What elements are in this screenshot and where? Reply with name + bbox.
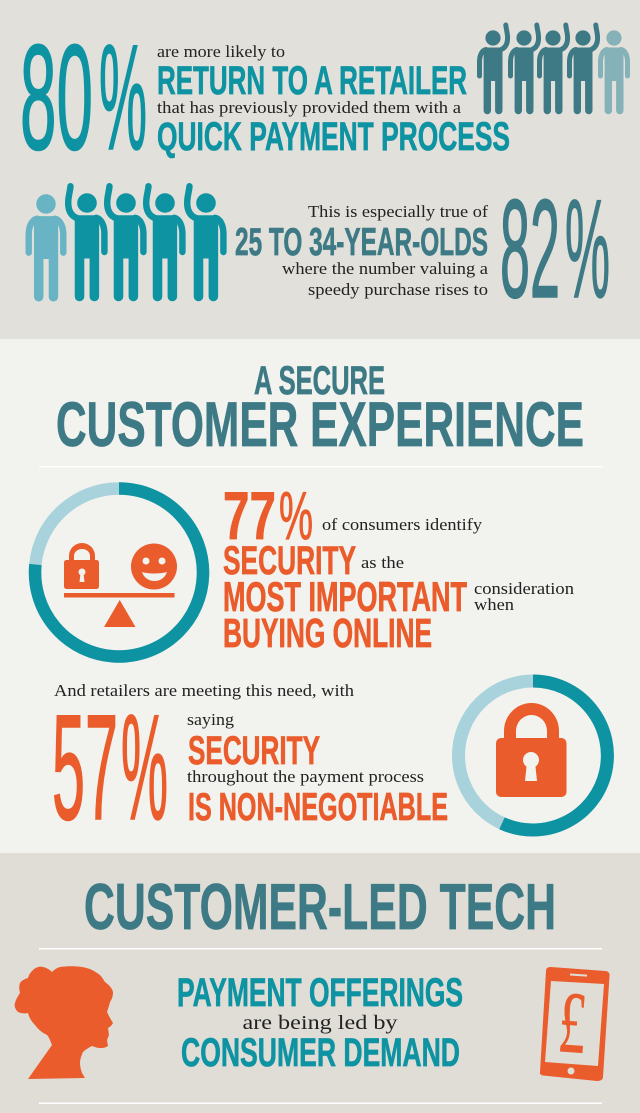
heading: a secure: A SECURE <box>254 359 385 403</box>
text: as the: as the <box>361 553 404 572</box>
text: speedy purchase: speedy purchase rises to <box>308 280 488 299</box>
statistic: 77 percent: % <box>279 478 313 554</box>
heading: most important: MOST IMPORTANT <box>223 573 467 620</box>
text: are more likely to: are more likely to <box>157 42 285 61</box>
text: especially true: This is especially true of <box>308 202 489 221</box>
icon: woman silhouette <box>15 966 113 1079</box>
text: throughout the payment process: throughout the payment process <box>187 767 424 786</box>
statistic: 57 percent <box>52 683 168 851</box>
heading: consumer demand: CONSUMER DEMAND <box>181 1031 460 1075</box>
heading: security: SECURITY <box>223 539 356 583</box>
text: % <box>121 683 168 851</box>
text: % <box>99 13 147 181</box>
text: are being led by: are being led by <box>242 1012 398 1034</box>
icon: five people, four of them raising a hand <box>480 25 628 114</box>
text: number valuing: where the number valuing a <box>282 259 489 278</box>
icon: padlock <box>496 703 566 797</box>
panel: top background <box>0 0 640 339</box>
text: consideration when: consideration <box>474 579 574 598</box>
text: saying: saying <box>187 710 234 729</box>
text: consideration when <box>474 579 574 614</box>
heading: 25 to 34-year-olds: 25 TO 34-YEAR-OLDS <box>235 221 488 264</box>
heading: buying online: BUYING ONLINE <box>223 610 432 656</box>
chart: 57 percent ring <box>458 681 608 830</box>
icon: mobile phone with pound sign <box>540 967 610 1081</box>
chart: 77 percent ring <box>35 488 203 656</box>
text: previously provided: that has previously provided them with a <box>157 98 462 117</box>
heading: return to a retailer: RETURN TO A RETAILER <box>157 59 467 103</box>
heading: payment offerings: PAYMENT OFFERINGS <box>177 971 463 1015</box>
statistic: 77 percent: 77 <box>223 478 276 554</box>
heading: is non-negotiable: IS NON-NEGOTIABLE <box>188 786 448 829</box>
heading: security: SECURITY <box>188 729 320 773</box>
panel: middle background <box>0 339 640 853</box>
text: consideration when: when <box>474 595 514 614</box>
text: of consumers identify: of consumers identify <box>322 515 483 534</box>
icon: mobile phone with pound sign: £ <box>556 974 589 1073</box>
panel: bottom background <box>0 853 640 1113</box>
icon: five younger people, four of them raising a hand <box>29 186 223 302</box>
icon: scale balancing padlock and smiley <box>64 543 177 627</box>
statistic: 80 percent: 80 <box>20 13 93 181</box>
statistic: 57 percent: 57 <box>52 683 118 851</box>
text: retailers meeting this need: And retailers are meeting this need, with <box>54 681 355 700</box>
